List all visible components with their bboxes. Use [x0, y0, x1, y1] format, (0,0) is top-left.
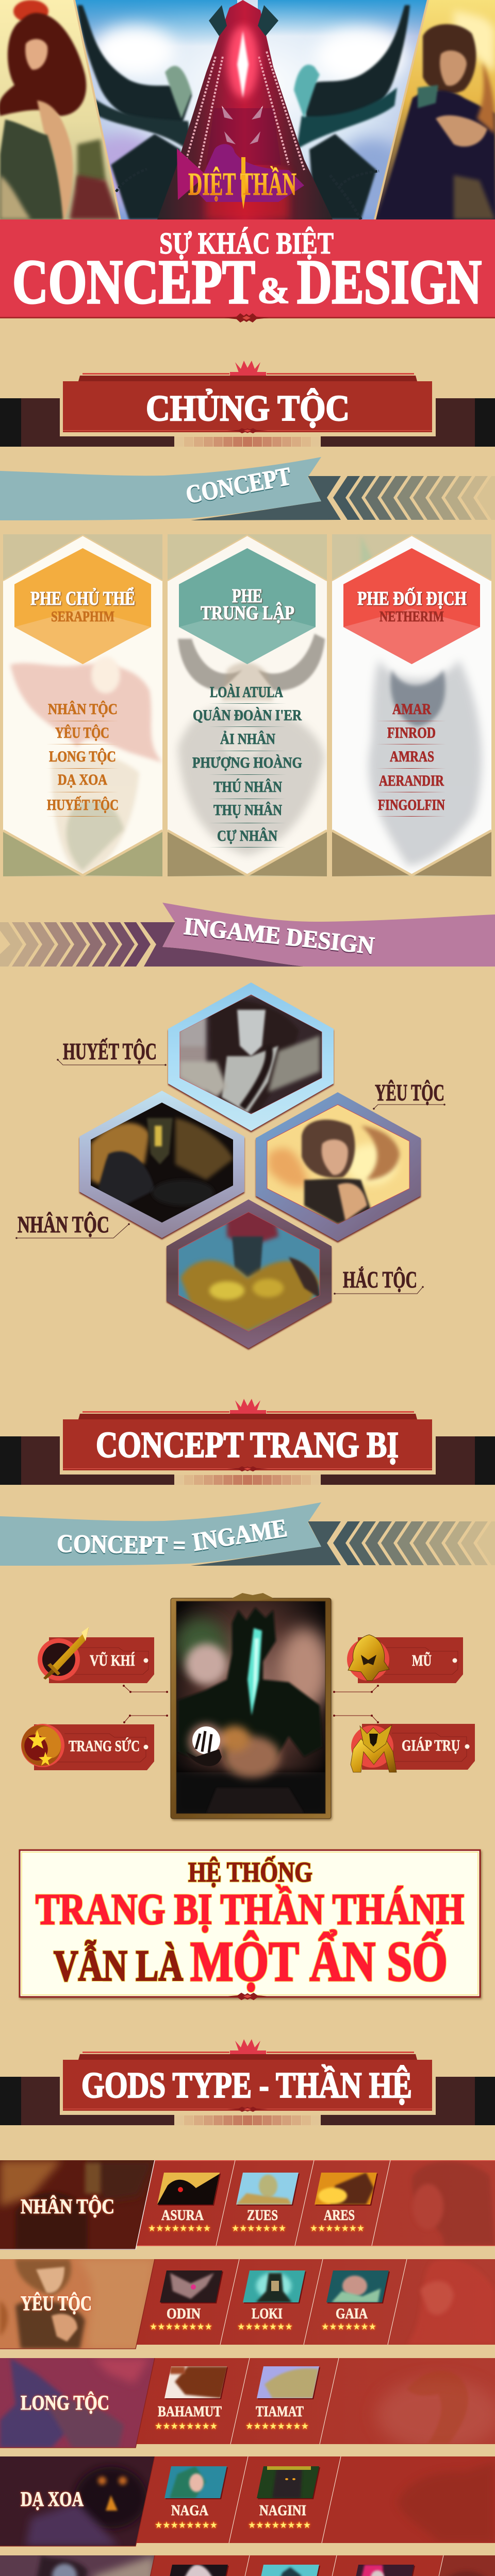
ribbon: ingame design — [0, 903, 495, 967]
hero artwork — [0, 0, 495, 219]
faction list — [192, 684, 302, 848]
panel: phe đối địch — [332, 534, 491, 876]
god: nagini — [248, 2466, 321, 2531]
badge hexagon: PHE ĐỐI ĐỊCH — [357, 587, 467, 609]
god: tiamat — [245, 2366, 321, 2432]
god: naga: ★★★★★★★★ — [155, 2520, 218, 2531]
title ampersand: & — [257, 270, 290, 311]
faction list: LONG TỘC — [49, 748, 116, 765]
label: huyết tộc: HUYẾT TỘC — [63, 1038, 157, 1064]
badge hexagon: SERAPHIM — [51, 608, 114, 625]
item tag: giáp trụ: GIÁP TRỤ — [402, 1736, 460, 1754]
badge hexagon: NETHERIM — [380, 608, 444, 625]
badge hexagon: PHE — [232, 585, 262, 607]
god: gaia: ★★★★★★★ — [321, 2321, 376, 2332]
faction list — [376, 701, 446, 817]
faction list: AERANDIR — [379, 772, 444, 789]
ornament — [225, 1993, 270, 2000]
god: gaia — [321, 2270, 391, 2332]
label: yêu tộc — [373, 1079, 446, 1110]
faction list: FINROD — [387, 724, 436, 741]
icon: armour — [351, 1725, 397, 1772]
label: huyết tộc — [57, 1038, 167, 1066]
faction list: LOÀI ATULA — [210, 684, 283, 701]
badge hexagon: PHE CHỦ THỂ — [30, 587, 135, 609]
faction list: PHƯỢNG HOÀNG — [192, 754, 302, 771]
connector lines — [123, 1685, 379, 1723]
section header: chủng tộc: CHỦNG TỘC — [146, 388, 350, 429]
god: asura: ★★★★★★★★ — [148, 2223, 211, 2234]
item tag: giáp trụ — [351, 1724, 475, 1772]
hex portrait: huyết tộc — [168, 982, 334, 1131]
faction list: THỤ NHÂN — [213, 802, 282, 819]
panel art: dark armoured figure — [369, 659, 482, 866]
section header: concept trang bị: CONCEPT TRANG BỊ — [96, 1425, 399, 1465]
item tag: mũ — [347, 1635, 463, 1683]
faction list: CỰ NHÂN — [217, 827, 277, 844]
badge hexagon: TRUNG LẬP — [201, 602, 294, 624]
item tag: vũ khí — [38, 1627, 154, 1683]
title CONCEPT: CONCEPT — [12, 247, 255, 317]
label: hắc tộc — [334, 1266, 424, 1295]
god: bahamut: BAHAMUT — [158, 2404, 222, 2420]
row: dạ xoa — [0, 2456, 495, 2546]
faction list: YÊU TỘC — [55, 724, 109, 741]
label: yêu tộc: YÊU TỘC — [375, 1079, 444, 1106]
god: zues — [232, 2173, 301, 2234]
label: hắc tộc: HẮC TỘC — [343, 1266, 417, 1293]
god: bahamut — [155, 2366, 229, 2432]
god: nagini: ★★★★★★★★ — [248, 2520, 311, 2531]
god: tiamat: ★★★★★★★★ — [245, 2421, 309, 2432]
row: long tộc: LONG TỘC — [21, 2391, 109, 2414]
callout: thần thánh: VẪN LÀ — [54, 1940, 183, 1990]
faction list: ẢI NHÂN — [220, 731, 275, 748]
ribbon: ingame design: INGAME DESIGN — [183, 912, 376, 960]
panel: phe chủ thể — [3, 534, 162, 876]
section header: chủng tộc — [0, 361, 495, 447]
hex portrait: yêu tộc — [256, 1092, 421, 1241]
faction list: AMAR — [392, 701, 431, 718]
row: huyết tộc — [0, 2555, 495, 2576]
ornament — [224, 313, 269, 323]
row: yêu tộc: YÊU TỘC — [21, 2292, 92, 2315]
god: ares — [310, 2173, 379, 2234]
game logo: DIỆT THẦN — [188, 166, 296, 202]
item tag: vũ khí: VŨ KHÍ — [90, 1651, 135, 1669]
faction list: NHÂN TỘC — [48, 701, 118, 718]
ribbon: concept = ingame — [0, 1502, 495, 1566]
section header: concept trang bị — [0, 1399, 495, 1485]
faction list: HUYẾT TỘC — [47, 796, 119, 814]
row: dạ xoa: DẠ XOA — [21, 2487, 84, 2511]
hero center: chained deity — [72, 0, 433, 219]
callout: thần thánh: HỆ THỐNG — [188, 1856, 312, 1888]
row: yêu tộc — [0, 2259, 495, 2349]
god: asura: ASURA — [161, 2208, 204, 2224]
hero separators — [74, 0, 428, 219]
god: persephone — [337, 2565, 418, 2576]
god: bahamut: ★★★★★★★★ — [155, 2421, 218, 2432]
god: zues: ★★★★★★★ — [232, 2223, 286, 2234]
god: naga: NAGA — [171, 2503, 209, 2519]
god: ares: ★★★★★★★ — [310, 2223, 365, 2234]
item tag: trang sức: TRANG SỨC — [69, 1737, 140, 1755]
row: nhân tộc — [0, 2160, 495, 2250]
row: nhân tộc: NHÂN TỘC — [21, 2195, 114, 2218]
row: long tộc — [0, 2358, 495, 2451]
faction list: THÚ NHÂN — [213, 778, 282, 795]
god: odin: ODIN — [167, 2306, 201, 2322]
icon: ring — [15, 1719, 68, 1772]
god: cain — [156, 2565, 230, 2576]
character card — [171, 1593, 331, 1819]
label: nhân tộc: NHÂN TỘC — [18, 1211, 109, 1238]
god: loki — [237, 2270, 307, 2332]
badge hexagon — [343, 548, 480, 664]
section header: gods type — [0, 2039, 495, 2125]
item tag: mũ: MŨ — [412, 1651, 432, 1669]
callout: thần thánh — [20, 1850, 480, 2000]
ribbon: concept: CONCEPT — [184, 461, 293, 509]
faction list: QUÂN ĐOÀN I'ER — [193, 707, 302, 724]
hero left: forest heroine — [0, 0, 124, 219]
god: tiamat: TIAMAT — [256, 2404, 304, 2420]
faction list — [46, 701, 119, 817]
icon: helmet — [347, 1635, 389, 1681]
god: zues: ZUES — [247, 2208, 278, 2224]
god: hades — [250, 2565, 321, 2576]
god: gaia: GAIA — [336, 2306, 368, 2322]
ribbon: concept — [0, 457, 495, 520]
faction list: DẠ XOA — [58, 771, 107, 788]
title line 1: SỰ KHÁC BIỆT — [159, 226, 334, 260]
god: loki: LOKI — [252, 2306, 283, 2322]
hex portrait: hắc tộc — [167, 1199, 332, 1348]
icon: sword — [38, 1627, 89, 1681]
god: odin — [150, 2270, 224, 2332]
god: ares: ARES — [324, 2208, 355, 2224]
god: loki: ★★★★★★★ — [237, 2321, 293, 2332]
section header: gods type: GODS TYPE - THẦN HỆ — [81, 2064, 412, 2106]
title band — [0, 219, 495, 323]
hex portrait: nhân tộc — [79, 1091, 244, 1238]
game logo — [177, 144, 304, 209]
ribbon: concept = ingame: CONCEPT = — [57, 1529, 186, 1560]
item tag: trang sức — [15, 1719, 154, 1772]
faction list: FINGOLFIN — [378, 796, 445, 814]
god: nagini: NAGINI — [259, 2503, 306, 2519]
god: asura — [148, 2173, 222, 2234]
panel: phe trung lập — [168, 534, 327, 876]
ribbon: concept = ingame: INGAME — [190, 1513, 289, 1556]
panel art: red-haired heroine — [10, 656, 162, 875]
badge hexagon — [179, 548, 316, 664]
panel art: horned beast — [178, 634, 325, 855]
faction list: AMRAS — [390, 748, 434, 765]
god: odin: ★★★★★★★★ — [150, 2321, 212, 2332]
god: naga — [155, 2466, 229, 2531]
badge hexagon — [14, 548, 151, 664]
hero right: fire heroine — [371, 0, 495, 219]
